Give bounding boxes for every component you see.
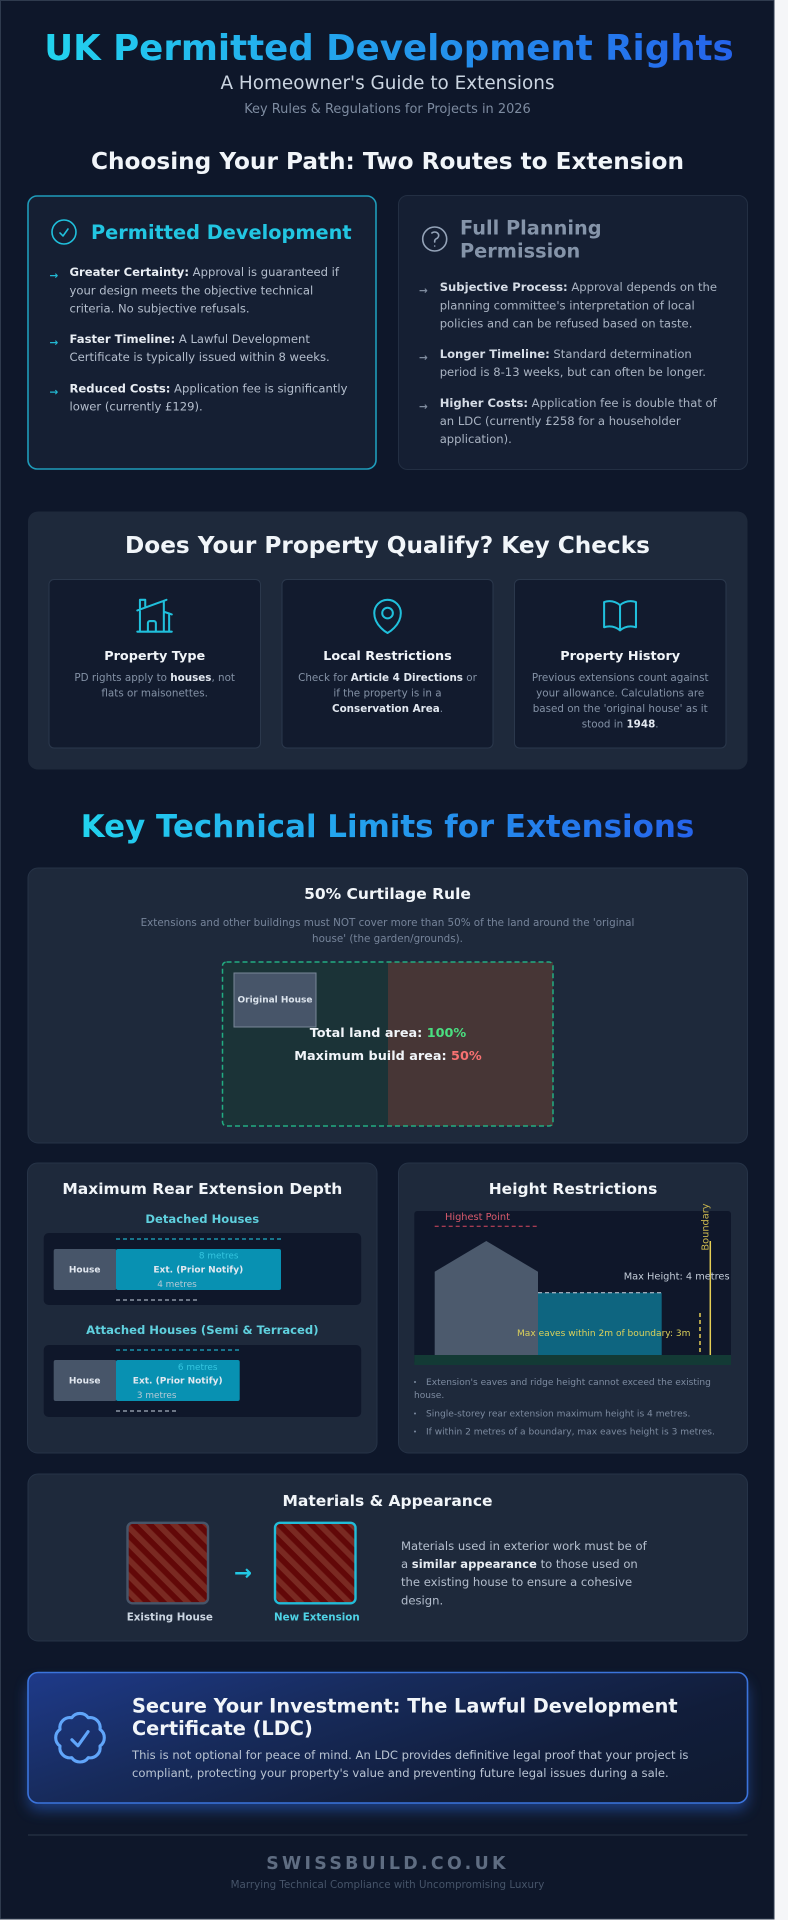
brand: SWISSBUILD.CO.UK [266,1854,509,1874]
item: greater certainty [50,265,340,316]
description: This is not optional for peace of mind. An LDC provides definitive legal proof that your project is [131,1748,688,1762]
description: the existing house to ensure a cohesive [401,1575,632,1589]
item: reduced costs: → [50,386,58,398]
diagram: attached houses: 3 metres [137,1391,177,1401]
swatch: new extension: New Extension [274,1612,360,1624]
icon: open book [604,601,636,630]
icon: map pin [374,600,401,633]
icon: house [137,600,172,632]
item: higher costs: → [419,401,428,413]
bullet list: If within 2 metres of a boundary, max eaves height is 3 metres. [426,1428,715,1438]
heading: Permission [460,240,580,262]
heading: Height Restrictions [489,1180,657,1198]
card: property history: stood in 1948. [582,718,659,730]
tagline: Marrying Technical Compliance with Uncompromising Luxury [231,1879,544,1891]
item: higher costs: application). [440,432,512,446]
card: property type [49,580,260,748]
arrow: → [234,1561,252,1586]
card: property type: Property Type [104,649,205,664]
diagram: land split: Maximum build area: 50% [294,1049,482,1064]
area labels: Total land area: 100% [310,1026,466,1041]
item: higher costs [419,396,718,446]
card: property type: PD rights apply to houses, not [74,672,235,684]
bullet list: Single-storey rear extension maximum height is 4 metres. [426,1410,690,1420]
diagram: height section [414,1203,731,1365]
diagram: attached houses: 6 metres [178,1363,218,1373]
panel: permitted development [28,196,376,469]
item: reduced costs: lower (currently £129). [70,400,203,414]
heading: 50% Curtilage Rule [304,885,471,903]
card: local restrictions [282,580,493,748]
heading: choosing your path: Choosing Your Path: Two Routes to Extension [91,148,684,175]
panel: maximum rear extension depth [28,1163,377,1453]
heading: Full Planning [460,216,602,240]
icon: question circle [423,227,447,251]
heading: key technical limits: Key Technical Limits for Extensions [81,809,694,845]
card: property history [514,580,726,748]
item: higher costs: an LDC (currently £258 for a householder [440,414,681,428]
callout: lawful development certificate [28,1672,748,1810]
diagram: attached houses: House [69,1377,100,1387]
item: subjective process: policies and can be refused based on taste. [440,316,692,330]
bullet list: Extension's eaves and ridge height cannot exceed the existing [426,1378,711,1388]
description [401,1539,648,1608]
swatch: existing house: Existing House [127,1612,213,1624]
icon: check circle [52,220,76,244]
heading: Permitted Development [91,221,352,244]
heading: Certificate (LDC) [132,1717,313,1740]
item: reduced costs: Reduced Costs: Application fee is significantly [70,382,348,396]
description: Materials used in exterior work must be of [401,1539,648,1553]
item: greater certainty: Greater Certainty: Approval is guaranteed if [70,265,340,279]
item: longer timeline: Longer Timeline: Standard determination [440,347,692,361]
heading: Secure Your Investment: The Lawful Development [132,1695,678,1718]
item: greater certainty: criteria. No subjective refusals. [70,302,250,316]
item: reduced costs [50,382,348,414]
diagram: attached houses: Attached Houses (Semi & Terraced) [86,1323,319,1337]
description: house' (the garden/grounds). [312,933,463,945]
header [44,28,734,117]
panel: key checks [28,512,748,770]
card: property history: based on the 'original house' as it [533,703,708,715]
item: subjective process [419,280,717,330]
description: Extensions and other buildings must NOT cover more than 50% of the land around the 'original [141,917,634,929]
card: property history: Previous extensions count against [532,672,709,684]
bullet list: house. [414,1391,444,1401]
card: property history: Property History [560,649,681,664]
diagram: attached houses: Ext. (Prior Notify) [133,1377,223,1387]
diagram: height section: Boundary [700,1203,712,1251]
heading: Maximum Rear Extension Depth [62,1180,342,1198]
diagram: detached houses: Detached Houses [145,1212,259,1226]
diagram: height section: Max eaves within 2m of boundary: 3m [517,1329,691,1339]
card: local restrictions: Check for Article 4 Directions or [298,672,478,684]
swatch: existing house [127,1523,213,1624]
item: faster timeline: Certificate is typically issued within 8 weeks. [70,350,330,364]
card: local restrictions: if the property is in a [333,688,442,700]
diagram: height section: Highest Point [445,1212,510,1223]
diagram: attached houses [44,1323,361,1417]
panel: full planning permission [398,196,748,470]
item: greater certainty: your design meets the objective technical [70,284,313,298]
item: subjective process: planning committee's interpretation of local [440,298,695,312]
item: longer timeline: → [419,352,428,364]
card: local restrictions: Local Restrictions [323,649,452,664]
card: property type: flats or maisonettes. [101,688,208,700]
swatch: new extension [274,1523,360,1624]
diagram: detached houses: Ext. (Prior Notify) [153,1266,243,1276]
card: property history: your allowance. Calculations are [536,688,704,700]
bullet list [414,1378,715,1438]
item: longer timeline [419,347,706,379]
item: longer timeline: period is 8-13 weeks, but can often be longer. [440,365,706,379]
item: faster timeline: Faster Timeline: A Lawful Development [70,332,310,346]
panel: 50% curtilage rule [28,868,748,1143]
diagram: detached houses: 4 metres [157,1280,197,1290]
date line: Key Rules & Regulations for Projects in 2026 [244,102,531,117]
item: faster timeline [50,332,330,364]
item: subjective process: → [419,285,428,297]
diagram: detached houses: House [69,1266,100,1276]
original house [234,973,316,1027]
description: compliant, protecting your property's value and preventing future legal issues during a sale. [132,1766,669,1780]
original house: Original House [238,996,312,1006]
panel: materials and appearance [28,1474,748,1641]
card: local restrictions: Conservation Area. [332,703,443,715]
item: subjective process: Subjective Process: Approval depends on the [440,280,717,294]
description: design. [401,1594,443,1608]
diagram: land split [222,962,553,1126]
diagram: detached houses: 8 metres [199,1252,239,1262]
diagram: detached houses [44,1212,361,1305]
item: greater certainty: → [50,270,58,282]
title: UK Permitted Development Rights [44,28,734,69]
item: higher costs: Higher Costs: Application fee is double that of [440,396,718,410]
item: faster timeline: → [50,337,58,349]
description: a similar appearance to those used on [401,1557,638,1571]
footer [231,1854,544,1891]
heading: Materials & Appearance [282,1492,493,1510]
diagram: height section: Max Height: 4 metres [624,1272,730,1283]
heading: Does Your Property Qualify? Key Checks [125,532,650,559]
subtitle: A Homeowner's Guide to Extensions [220,73,555,94]
icon: check badge [56,1713,104,1762]
panel: height restrictions [398,1163,748,1453]
